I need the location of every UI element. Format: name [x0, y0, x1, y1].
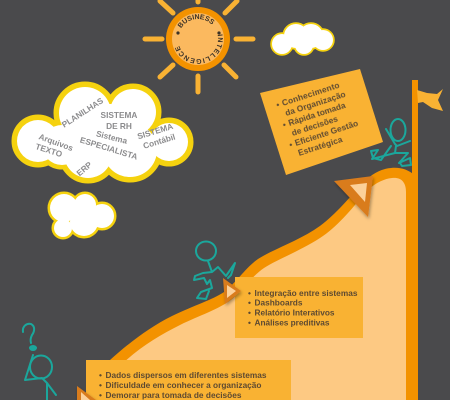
benefits list [275, 78, 363, 160]
intermediate list: • [248, 308, 251, 318]
initial list: Demorar para tomada de decisões [106, 390, 242, 400]
intermediate list [248, 288, 358, 328]
figure: climber midway [194, 242, 235, 299]
intermediate list: Dashboards [254, 298, 303, 308]
cloud labels: TEXTO [34, 141, 64, 159]
intermediate list: • [248, 288, 251, 298]
cloud labels: ERP [74, 159, 94, 178]
sun rays [145, 0, 253, 92]
cloud: top right [272, 24, 333, 54]
cloud labels: SISTEMA [101, 110, 137, 120]
cloud labels: PLANILHAS [60, 95, 105, 130]
cloud labels [34, 95, 176, 178]
panel: initial stage [86, 360, 291, 400]
benefits list: • [275, 99, 281, 110]
panel: benefits note [260, 69, 383, 175]
cloud labels: Sistema [95, 128, 129, 146]
benefits list: Rápida tomada [287, 100, 347, 128]
benefits list: de decisões [290, 113, 339, 138]
intermediate list: Integração entre sistemas [254, 288, 358, 298]
cloud labels: Contábil [142, 131, 176, 151]
sun: business intelligence [142, 0, 256, 94]
cloud labels: SISTEMA [136, 121, 174, 141]
intermediate list: • [248, 298, 251, 308]
benefits list: Estratégica [297, 134, 344, 158]
flag [412, 80, 443, 400]
figure: climber at summit [371, 119, 411, 166]
initial list: • [99, 380, 102, 390]
cloud: data sources [16, 86, 189, 179]
cloud labels: Arquivos [37, 131, 75, 153]
benefits list: Conhecimento [281, 80, 341, 108]
benefits list: da Organização [284, 89, 347, 118]
panel: intermediate stage [235, 277, 363, 338]
cloud: small [50, 194, 114, 237]
hill: growth curve [84, 168, 418, 400]
sun: business intelligence: INTELLIGENCE [174, 34, 223, 64]
initial list [99, 370, 267, 400]
question mark [23, 324, 36, 350]
figure: confused person [23, 324, 56, 400]
intermediate list: • [248, 318, 251, 328]
intermediate list: Análises preditivas [254, 318, 330, 328]
ring separator dots [176, 31, 221, 35]
arrow: bottom step [77, 386, 96, 400]
benefits list: • [288, 139, 294, 150]
initial list: • [99, 370, 102, 380]
cloud labels: ESPECIALISTA [79, 135, 139, 162]
cloud labels: DE RH [106, 121, 132, 131]
initial list: Dificuldade em conhecer a organização [106, 380, 262, 390]
arrow: middle step [223, 278, 241, 304]
benefits list: Eficiente Gestão [294, 118, 359, 148]
sun disc [166, 7, 230, 71]
initial list: Dados dispersos em diferentes sistemas [106, 370, 267, 380]
intermediate list: Relatório Interativos [254, 308, 335, 318]
sun ring text: BUSINESS [178, 14, 214, 28]
benefits list: • [281, 119, 287, 130]
arrow: top step [334, 176, 373, 217]
initial list: • [99, 390, 102, 400]
